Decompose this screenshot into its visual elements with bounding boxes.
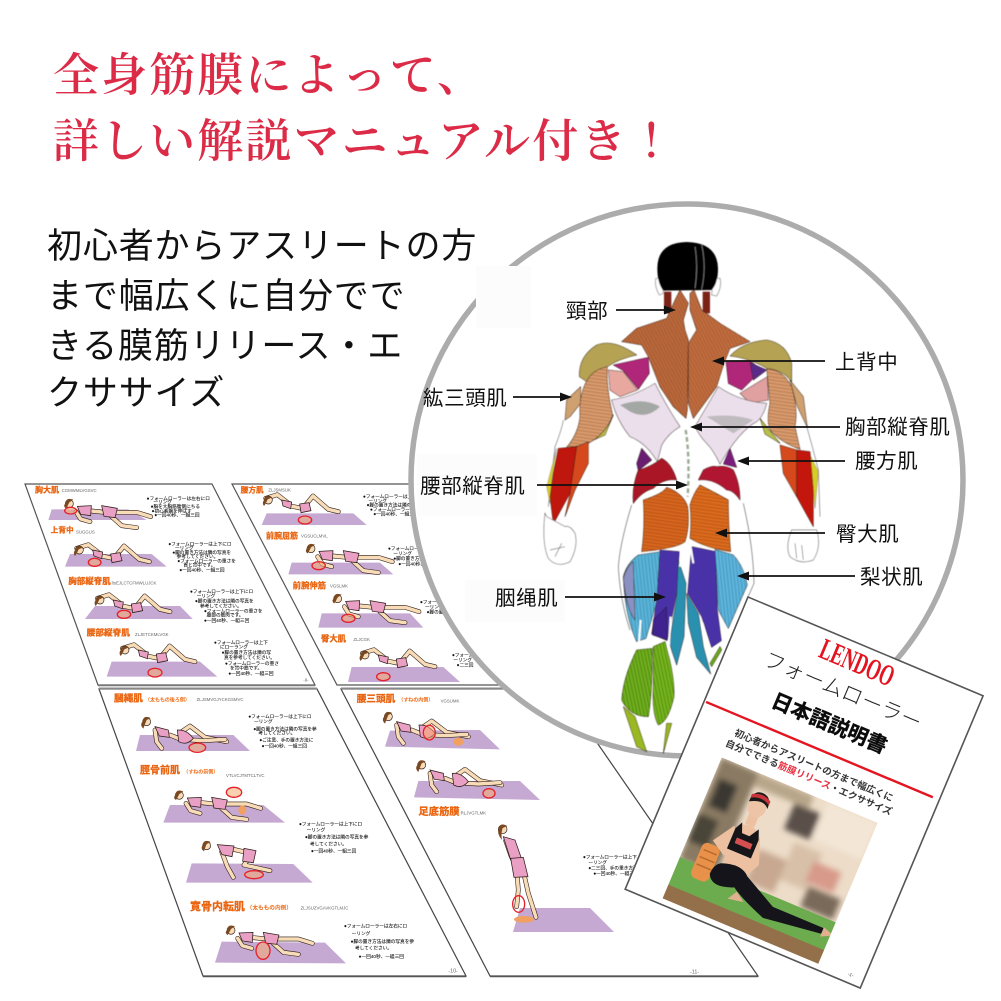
panel: manual page 9: ltsEJLCTCFMWLUJCK — [112, 580, 157, 585]
intro text block: まで幅広くに自分でで — [47, 277, 406, 316]
panel: manual page 11: ●フォームローラーは上下 — [583, 853, 637, 860]
panel: manual page 9: ●フォームローラーは上下 — [214, 639, 268, 646]
panel: manual page 11: ●二三回、手の重き方法 — [588, 864, 638, 871]
label: gluteus maximus: 臀大肌 — [836, 523, 899, 546]
panel: manual page 10 back: 前腕伸筋 — [293, 580, 326, 590]
panel: manual page 9: ●フォームローラーの重さ — [225, 660, 279, 667]
panel: manual page 10 back: ●脚の置き方法は隣の写真 — [367, 502, 421, 509]
panel: manual page 10: 脛骨前肌 — [140, 764, 180, 777]
panel: manual page 10: （すねの前側） — [183, 768, 218, 775]
panel: manual page 10: ーリング — [254, 718, 273, 725]
label: piriformis — [737, 566, 923, 589]
lower body muscles — [544, 485, 819, 753]
panel: manual page 10 back: ーリング — [425, 603, 444, 610]
panel: manual page 9: ●フォームローラーは左右にロ — [147, 495, 210, 502]
label: lumbar erector — [420, 475, 688, 498]
label: upper back — [712, 351, 898, 374]
panel: manual page 10: ーリング — [307, 827, 326, 834]
intro text block: きる膜筋リリース・エ — [47, 327, 403, 366]
panel: manual page 10: ●ご注意、手の置き方法に — [259, 736, 314, 743]
panel: manual page 9: ●一回40秒、一組三回 — [179, 567, 225, 574]
booklet subtitle: 自分でできる筋膜リリース・エクササイズ — [724, 737, 894, 818]
panel: manual page 10 back: ●フォームローラーは上下にロ — [363, 493, 426, 500]
title — [53, 39, 676, 171]
panel: manual page 9: ●一回40秒、一組三回 — [228, 670, 274, 677]
panel: manual page 10 back: 前腕屈筋 — [266, 530, 298, 540]
panel: anatomy circle — [411, 204, 963, 756]
panel: manual page 9: CGMWMLVGSVC — [62, 488, 97, 493]
panel: manual page 9: 胸部縦脊肌 — [68, 576, 111, 586]
title: 詳しい解説マニュアル付き！ — [53, 105, 676, 171]
label: upper back: 上背中 — [835, 351, 898, 374]
panel: manual page 9: ●フォームローラーは上下にロ — [190, 588, 253, 595]
panel: manual page 9: 参考してください。 — [200, 602, 242, 609]
panel: manual page 10 back: ●脚の置き方法は隣の写真 — [393, 555, 448, 562]
panel: manual page 10: ●脚の置き方法は隣の写真を参 — [351, 938, 414, 945]
panel: manual page 10: 考してください。 — [258, 730, 295, 737]
panel: manual page 10 back: 臀大肌 — [321, 634, 347, 644]
panel: manual page 10: ●脚の置き方法は隣の写真を参 — [305, 833, 369, 840]
panel: manual page 10 back: ●フォームローラーの重さ — [370, 506, 424, 513]
panel: manual page 11 — [341, 688, 758, 976]
panel: manual page 10: ●一回40秒、一組三回 — [262, 743, 307, 750]
panel: manual page 9: 腰部縦脊肌 — [87, 627, 130, 638]
panel: manual page 10: 考してください。 — [310, 840, 347, 847]
panel: manual page 9: にローラング — [220, 644, 248, 651]
chart: muscle figure, back view — [544, 242, 820, 753]
label: hamstrings: 胭绳肌 — [495, 587, 558, 610]
panel: manual page 10: -10- — [448, 968, 458, 974]
panel: manual page 10 back: ZLJSMSUK — [268, 488, 291, 493]
panel: manual page 9: 上背中 — [51, 525, 74, 535]
woman — [713, 826, 735, 856]
panel: manual page 10: VTLVCJTMTCLTVC — [226, 773, 265, 778]
label: thoracic erector — [690, 416, 950, 439]
intro text block — [47, 227, 477, 413]
panel: manual page 11: VGSUMK — [441, 699, 460, 704]
panel: manual page 9: ●一回40秒、一組三回 — [154, 511, 200, 518]
panel: manual page 10 back: ーリング — [368, 497, 387, 504]
photo: woman on foam roller — [663, 757, 880, 965]
panel: manual page 9: ーリング — [153, 499, 172, 506]
label: piriformis: 梨状肌 — [860, 566, 923, 589]
panel: manual page 9: ●脚の置き方法は隣の写真を — [195, 597, 254, 604]
panel: manual page 10: 寛骨内転肌 — [190, 899, 245, 913]
panel: manual page 9: ーリング — [175, 545, 194, 552]
panel: manual page 9: -9- — [303, 677, 309, 682]
panel: manual page 11: ーリング — [588, 859, 607, 866]
panel: manual page 10: ●フォームローラーは左右にロ — [344, 922, 407, 929]
panel: manual page 9: 首と背中です。 — [183, 562, 215, 569]
panel: manual page 11: ●一回40秒、一組三回 — [593, 870, 639, 877]
panel: manual page 9: を背中筋です。 — [230, 664, 262, 671]
panel: manual page 9: ●脚の置き方法は隣の写 — [222, 649, 271, 656]
intro text block: クササイズ — [47, 374, 225, 413]
label: hamstrings — [495, 587, 666, 610]
panel: manual page 9: 腰部の筋肉です。 — [207, 612, 243, 619]
panel: manual page 10: ●脚の置き方法は隣の写真を参 — [253, 725, 317, 732]
label background patches — [417, 266, 565, 622]
panel: manual page 10 back: ●二三回 — [457, 663, 474, 669]
panel: manual page 10 back: ●一回40秒、一組三回 — [373, 510, 419, 517]
upper body muscles — [547, 290, 820, 527]
label: neck: 頸部 — [566, 300, 608, 323]
panel: manual page 11: 足底筋膜 — [418, 805, 460, 818]
head — [655, 242, 721, 313]
panel: manual cover booklet — [625, 597, 983, 988]
panel: manual page 10 back: VGSUCLMVL — [301, 534, 328, 539]
panel: manual page 10 — [99, 688, 466, 976]
panel: manual page 10 back: ●脚の置き方法 — [427, 608, 458, 615]
panel: manual page 10: ●フォームローラーは上下にロ — [299, 820, 362, 827]
panel: manual page 9: ●フォームローラーの重さを — [204, 607, 263, 614]
panel: manual page 9: ●脚の置き方法は隣の写真を — [172, 549, 231, 556]
panel: manual page 10: 膕繩肌 — [114, 693, 143, 705]
booklet title: Japanese manual: 日本語説明書 — [768, 689, 890, 758]
panel: manual page 9: ●フォームローラーは上下にロ — [168, 540, 232, 547]
panel: manual page 11: （すねの内側） — [398, 697, 433, 704]
panel: manual page 9: SUGGUS — [76, 529, 95, 534]
panel: manual page 9: ●胸を大胸筋腹側にちる — [151, 503, 200, 510]
panel: manual page 11: RLJVGTLMK — [461, 810, 486, 815]
panel: manual page 10: ーリング — [352, 930, 371, 937]
panel: manual page 9: ZLJETCKMLVGK — [135, 632, 169, 637]
panel: manual page 10 back: ●フォームローラー — [420, 599, 460, 605]
label: gluteus maximus — [715, 523, 899, 546]
label: lumbar erector: 腰部縦脊肌 — [420, 475, 526, 498]
booklet subtitle: 初心者からアスリートの方まで幅広くに — [733, 727, 895, 804]
panel: manual page 10: 考してください。 — [355, 945, 392, 952]
booklet title: foam roller: フォームローラー — [760, 648, 925, 735]
title: 全身筋膜によって、 — [53, 39, 485, 105]
panel: manual page 9: 胸大肌 — [35, 485, 59, 495]
intro text block: 初心者からアスリートの方 — [47, 227, 477, 266]
panel: manual page 10: （太ももの後ろ側） — [145, 696, 190, 703]
panel: manual page 10 back: ●一回40秒、一組三回 — [398, 560, 444, 567]
label: quadratus lumborum: 腰方肌 — [855, 450, 918, 473]
label: quadratus lumborum — [737, 450, 918, 473]
panel: manual page 9: 参考してください。 — [177, 553, 218, 560]
panel: manual page 9 — [25, 484, 315, 686]
panel: manual page 9: ●一回40秒、一組三回 — [204, 617, 250, 624]
panel: manual page 10: ZLJSUZVGAVKGTLMJC — [301, 905, 348, 910]
label: triceps: 紘三頭肌 — [423, 387, 507, 410]
divider — [706, 702, 933, 797]
label: neck — [566, 300, 676, 323]
label: triceps — [423, 387, 572, 410]
foam roller — [691, 842, 720, 882]
panel: manual page 10 back: ●フォームローラーは上下 — [388, 545, 442, 552]
panel: manual page 10 back: 腰方肌 — [241, 484, 264, 494]
panel: manual page 10 back — [232, 484, 542, 685]
panel: manual page 9: 真を参考してください。 — [224, 654, 275, 661]
panel: manual page 11: 腰三頭肌 — [357, 694, 396, 705]
panel: manual page 10: （太ももの内側） — [247, 903, 292, 911]
label: thoracic erector: 胸部縦脊肌 — [845, 416, 950, 439]
panel: manual page 10 back: ZLJCGK — [353, 637, 370, 642]
panel: manual page 10: ZLJSMVGJYCKGSMVC — [197, 697, 244, 702]
panel: manual page 10 back: VGSLMK — [330, 584, 348, 589]
page number: -1- — [846, 971, 855, 979]
panel: manual page 11: -11- — [690, 969, 699, 975]
brand: LENDOO: LENDOO — [815, 633, 899, 693]
panel: manual page 10: ●一回40秒、一組三回 — [311, 847, 357, 854]
panel: manual page 9: ーリング — [197, 593, 216, 600]
panel: manual page 10 back: ーリング — [393, 550, 412, 557]
panel: manual page 10: ●フォームローラーは上下にロ — [248, 713, 312, 720]
panel: manual page 10: ●一回40秒、一組三回 — [359, 953, 404, 960]
panel: manual page 9: ●初心者腕を伸ばす — [152, 507, 192, 514]
panel: manual page 10 back: ーリング — [453, 657, 472, 664]
panel: manual page 10 back: ●フォームロー — [452, 653, 483, 658]
panel: manual page 9: ●フォームローラーの重さを — [177, 557, 236, 564]
